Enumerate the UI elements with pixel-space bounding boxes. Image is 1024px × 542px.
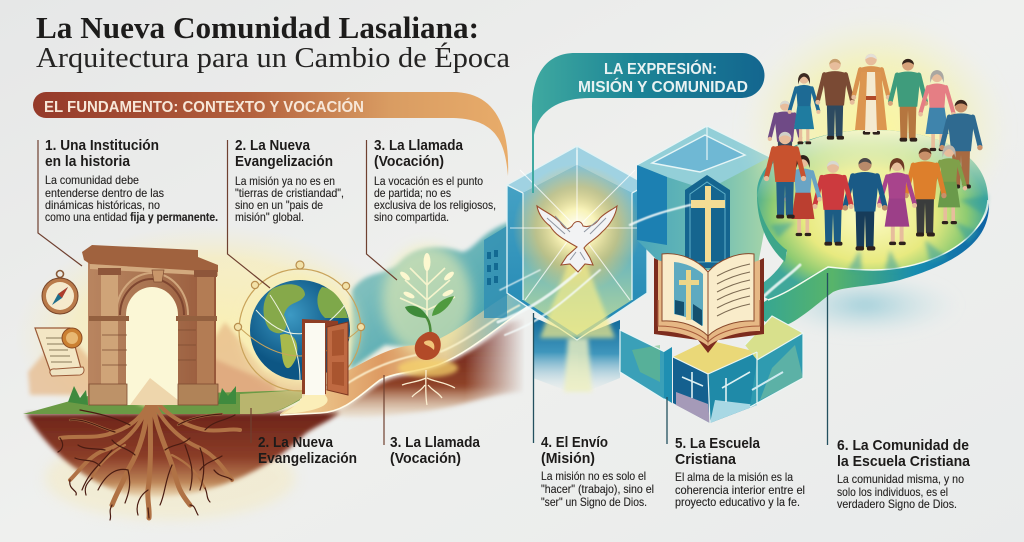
text block: 2. La Nueva Evangelización: 2. La Nueva — [235, 137, 311, 154]
text block: 4. El Envío: "hacer" (trabajo), sino el — [541, 483, 654, 496]
platform edge ribbon — [748, 203, 989, 328]
person: older woman in red — [812, 161, 854, 246]
title — [36, 10, 510, 74]
soil left — [26, 412, 340, 497]
illustration: dove hexagon — [507, 146, 647, 340]
text block: 6. La Comunidad de la Escuela Cristiana: La comunidad misma, y no — [837, 473, 964, 486]
platform top — [750, 130, 988, 300]
illustration: lower glass cubes — [620, 316, 803, 423]
text block: 1. Una Institución — [45, 137, 218, 224]
text block: 1. Una Institución: La comunidad debe — [45, 174, 139, 187]
person: man in brown suit — [815, 59, 855, 140]
text block: 2. La Nueva Evangelización: "tierras de cristiandad", — [235, 187, 344, 200]
illustration: blue glow below the platform — [770, 273, 960, 337]
label: 2. La Nueva Evangelización — [258, 434, 357, 467]
teal sky behind the sprout — [350, 222, 520, 370]
panel heading: foundation banner: EL FUNDAMENTO: CONTEXTO Y VOCACIÓN — [44, 97, 364, 116]
illustration: lower hexagon block — [533, 317, 620, 395]
icon: open book — [654, 254, 764, 353]
person: man in purple — [768, 101, 802, 172]
text block: 1. Una Institución: como una entidad fija y permanente. — [45, 211, 218, 224]
icon: globe with door — [234, 261, 365, 414]
grass — [23, 390, 300, 414]
text block: 4. El Envío: La misión no es solo el — [541, 470, 646, 483]
soil right — [325, 318, 530, 417]
roots — [58, 379, 240, 520]
label: 2. La Nueva Evangelización: Evangelización — [258, 450, 357, 467]
text block: 5. La Escuela Cristiana: Cristiana — [675, 451, 737, 468]
person: woman in pink — [918, 70, 956, 151]
text block: 6. La Comunidad de la Escuela Cristiana: 6. La Comunidad de — [837, 437, 969, 454]
text block: 4. El Envío: "ser" un Signo de Dios. — [541, 496, 647, 509]
text block: 2. La Nueva Evangelización: misión" global. — [235, 211, 304, 224]
icon: scroll with seal — [35, 328, 84, 376]
person: man in green shirt — [888, 59, 928, 142]
illustration: light streams — [498, 205, 800, 335]
text block: 5. La Escuela Cristiana: 5. La Escuela — [675, 435, 761, 452]
text block: 2. La Nueva Evangelización: La misión ya no es en — [235, 175, 335, 188]
panel heading: foundation banner — [33, 92, 508, 176]
text block: 5. La Escuela Cristiana: coherencia interior entre el — [675, 484, 805, 497]
text block: 1. Una Institución: 1. Una Institución — [45, 137, 159, 154]
text block: 5. La Escuela Cristiana: El alma de la misión es la — [675, 471, 793, 484]
person: man in blue with beard — [939, 100, 983, 189]
illustration: foundation landscape — [15, 222, 535, 520]
text block: 3. La Llamada: (Vocación) — [374, 153, 444, 170]
mountains — [28, 322, 320, 395]
text block: 5. La Escuela Cristiana — [675, 435, 805, 509]
illustration: cross tower — [637, 126, 770, 270]
person: woman in purple dress — [877, 158, 917, 245]
person: woman in blue jacket — [788, 73, 820, 144]
panel heading: expression banner: MISIÓN Y COMUNIDAD — [578, 78, 748, 96]
text block: 6. La Comunidad de la Escuela Cristiana — [837, 437, 971, 511]
person: man in red-orange sweater — [764, 132, 806, 219]
panel heading: expression banner: LA EXPRESIÓN: — [604, 60, 717, 78]
text block: 4. El Envío: 4. El Envío — [541, 434, 608, 451]
label: 3. La Llamada: (Vocación) — [390, 450, 461, 467]
icon: background building — [484, 226, 507, 318]
text block: 6. La Comunidad de la Escuela Cristiana: solo los individuos, es el — [837, 486, 948, 499]
title: La Nueva Comunidad Lasaliana: — [36, 10, 479, 45]
label: 3. La Llamada: 3. La Llamada — [390, 434, 481, 451]
text block: 3. La Llamada: 3. La Llamada — [374, 137, 464, 154]
text block: 4. El Envío — [541, 434, 654, 509]
icon: community platform — [740, 15, 1010, 328]
icon: seed and sprout — [382, 245, 472, 405]
winding path river — [280, 280, 535, 414]
icon: stone arch — [82, 245, 218, 405]
icon: compass — [42, 270, 78, 314]
icon: dove — [537, 206, 617, 272]
person: priest in orange — [851, 54, 891, 135]
title: Arquitectura para un Cambio de Época — [36, 41, 510, 74]
leader lines — [38, 140, 828, 445]
person: man in orange jacket — [903, 148, 947, 237]
text block: 1. Una Institución: entenderse dentro de las — [45, 187, 164, 200]
text block: 6. La Comunidad de la Escuela Cristiana: verdadero Signo de Dios. — [837, 498, 957, 511]
illustration: community circle — [764, 54, 983, 251]
text block: 1. Una Institución: en la historia — [45, 153, 131, 170]
text block: 3. La Llamada: de partida; no es — [374, 187, 451, 200]
text block: 6. La Comunidad de la Escuela Cristiana: la Escuela Cristiana — [837, 453, 971, 470]
text block: 2. La Nueva Evangelización — [235, 137, 344, 224]
text block: 4. El Envío: (Misión) — [541, 450, 595, 467]
text block: 3. La Llamada: sino compartida. — [374, 211, 449, 224]
person: man in dark blue — [842, 158, 888, 251]
text block: 3. La Llamada: La vocación es el punto — [374, 175, 483, 188]
text block: 3. La Llamada — [374, 137, 496, 224]
text block: 5. La Escuela Cristiana: proyecto educativo y la fe. — [675, 496, 800, 509]
person: woman in green — [931, 145, 967, 224]
panel heading: expression banner — [532, 53, 765, 193]
label: 2. La Nueva Evangelización: 2. La Nueva — [258, 434, 334, 451]
text block: 1. Una Institución: dinámicas históricas, no — [45, 199, 160, 212]
text block: 2. La Nueva Evangelización: sino en un "pais de — [235, 199, 323, 212]
platform top fade — [757, 130, 988, 200]
text block: 3. La Llamada: exclusiva de los religiosos, — [374, 199, 496, 212]
text block: 2. La Nueva Evangelización: Evangelización — [235, 153, 333, 170]
person: woman with red skirt — [784, 155, 822, 236]
label: 3. La Llamada — [390, 434, 481, 467]
